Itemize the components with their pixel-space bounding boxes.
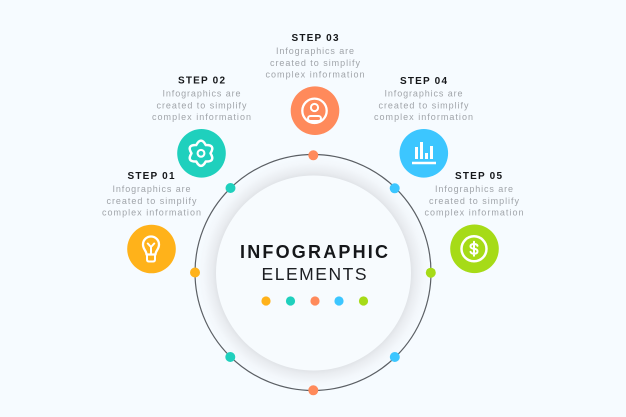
step 05 heading: STEP 05 xyxy=(455,171,502,182)
central circle with ring xyxy=(195,154,432,391)
step 04 text: complex information xyxy=(374,112,473,122)
title xyxy=(240,242,388,284)
title: INFOGRAPHIC xyxy=(240,242,388,262)
step 05 xyxy=(424,171,524,273)
step 03 text: Infographics are xyxy=(276,46,354,56)
step 03 heading: STEP 03 xyxy=(292,33,339,44)
step 03 text: complex information xyxy=(266,70,364,80)
step 01 text: complex information xyxy=(102,208,201,218)
step 02 text xyxy=(152,88,251,122)
title: ELEMENTS xyxy=(262,264,366,284)
ring node dots xyxy=(190,150,436,395)
icon: dollar coin xyxy=(450,224,499,273)
step 05 text: complex information xyxy=(424,208,524,218)
step 04 text: created to simplify xyxy=(378,100,469,110)
step 01 text: created to simplify xyxy=(106,196,197,206)
step 02 text: Infographics are xyxy=(162,88,240,98)
legend dots xyxy=(261,296,368,306)
step 01 heading: STEP 01 xyxy=(128,171,175,182)
step 04 xyxy=(374,76,473,178)
step 02 heading: STEP 02 xyxy=(178,76,225,86)
step 03 text: created to simplify xyxy=(270,58,360,68)
step 01 text xyxy=(102,184,201,218)
step 03 text xyxy=(266,46,364,80)
icon: light bulb xyxy=(127,225,176,273)
step 01 text: Infographics are xyxy=(112,184,190,194)
step 04 text: Infographics are xyxy=(384,88,462,98)
step 05 text xyxy=(424,184,524,218)
step 03 xyxy=(266,33,364,135)
step 04 text xyxy=(374,88,473,122)
step 04 heading: STEP 04 xyxy=(400,76,447,87)
icon: gear xyxy=(177,129,226,178)
step 05 text: Infographics are xyxy=(435,184,513,194)
step 02 text: complex information xyxy=(152,112,251,122)
step 02 xyxy=(152,76,251,178)
step 02 text: created to simplify xyxy=(156,100,247,110)
icon: bar chart xyxy=(400,129,448,178)
step 05 text: created to simplify xyxy=(429,196,520,206)
icon: user profile xyxy=(291,86,339,135)
step 01 xyxy=(102,171,201,273)
